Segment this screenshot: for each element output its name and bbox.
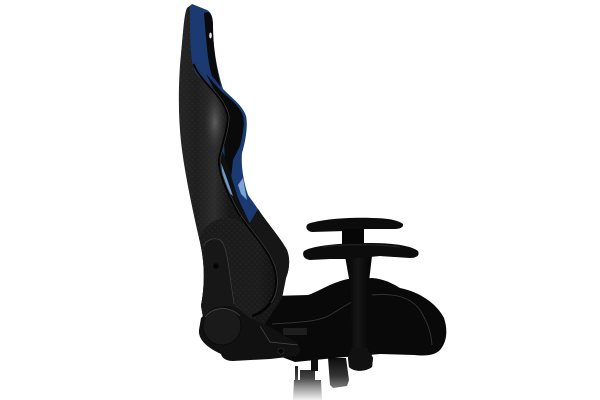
upper armrest pad [306,218,403,245]
armrest post [345,256,373,371]
dark channel [218,150,250,226]
bracket bolt [213,263,219,269]
base: gas lift and castor stem [293,356,349,400]
headrest slot [209,32,212,38]
black bolster inner [206,74,244,178]
tilt lever [283,328,307,335]
shell highlight [204,92,226,152]
blue inner backrest [189,4,258,227]
outer back shell [179,4,289,346]
plate bolt [278,348,284,354]
lower armrest pad [303,243,419,260]
seat cushion [250,278,446,362]
black headrest inner [204,12,221,87]
hinge plate [199,306,301,361]
lower shell panel [199,218,277,346]
recline mechanism [199,239,307,361]
shell piping [194,64,276,316]
back bracket [201,239,235,318]
right bolster side [248,209,289,303]
seat piping [272,295,432,345]
hinge disc [203,307,241,345]
light blue stripes [221,163,233,196]
